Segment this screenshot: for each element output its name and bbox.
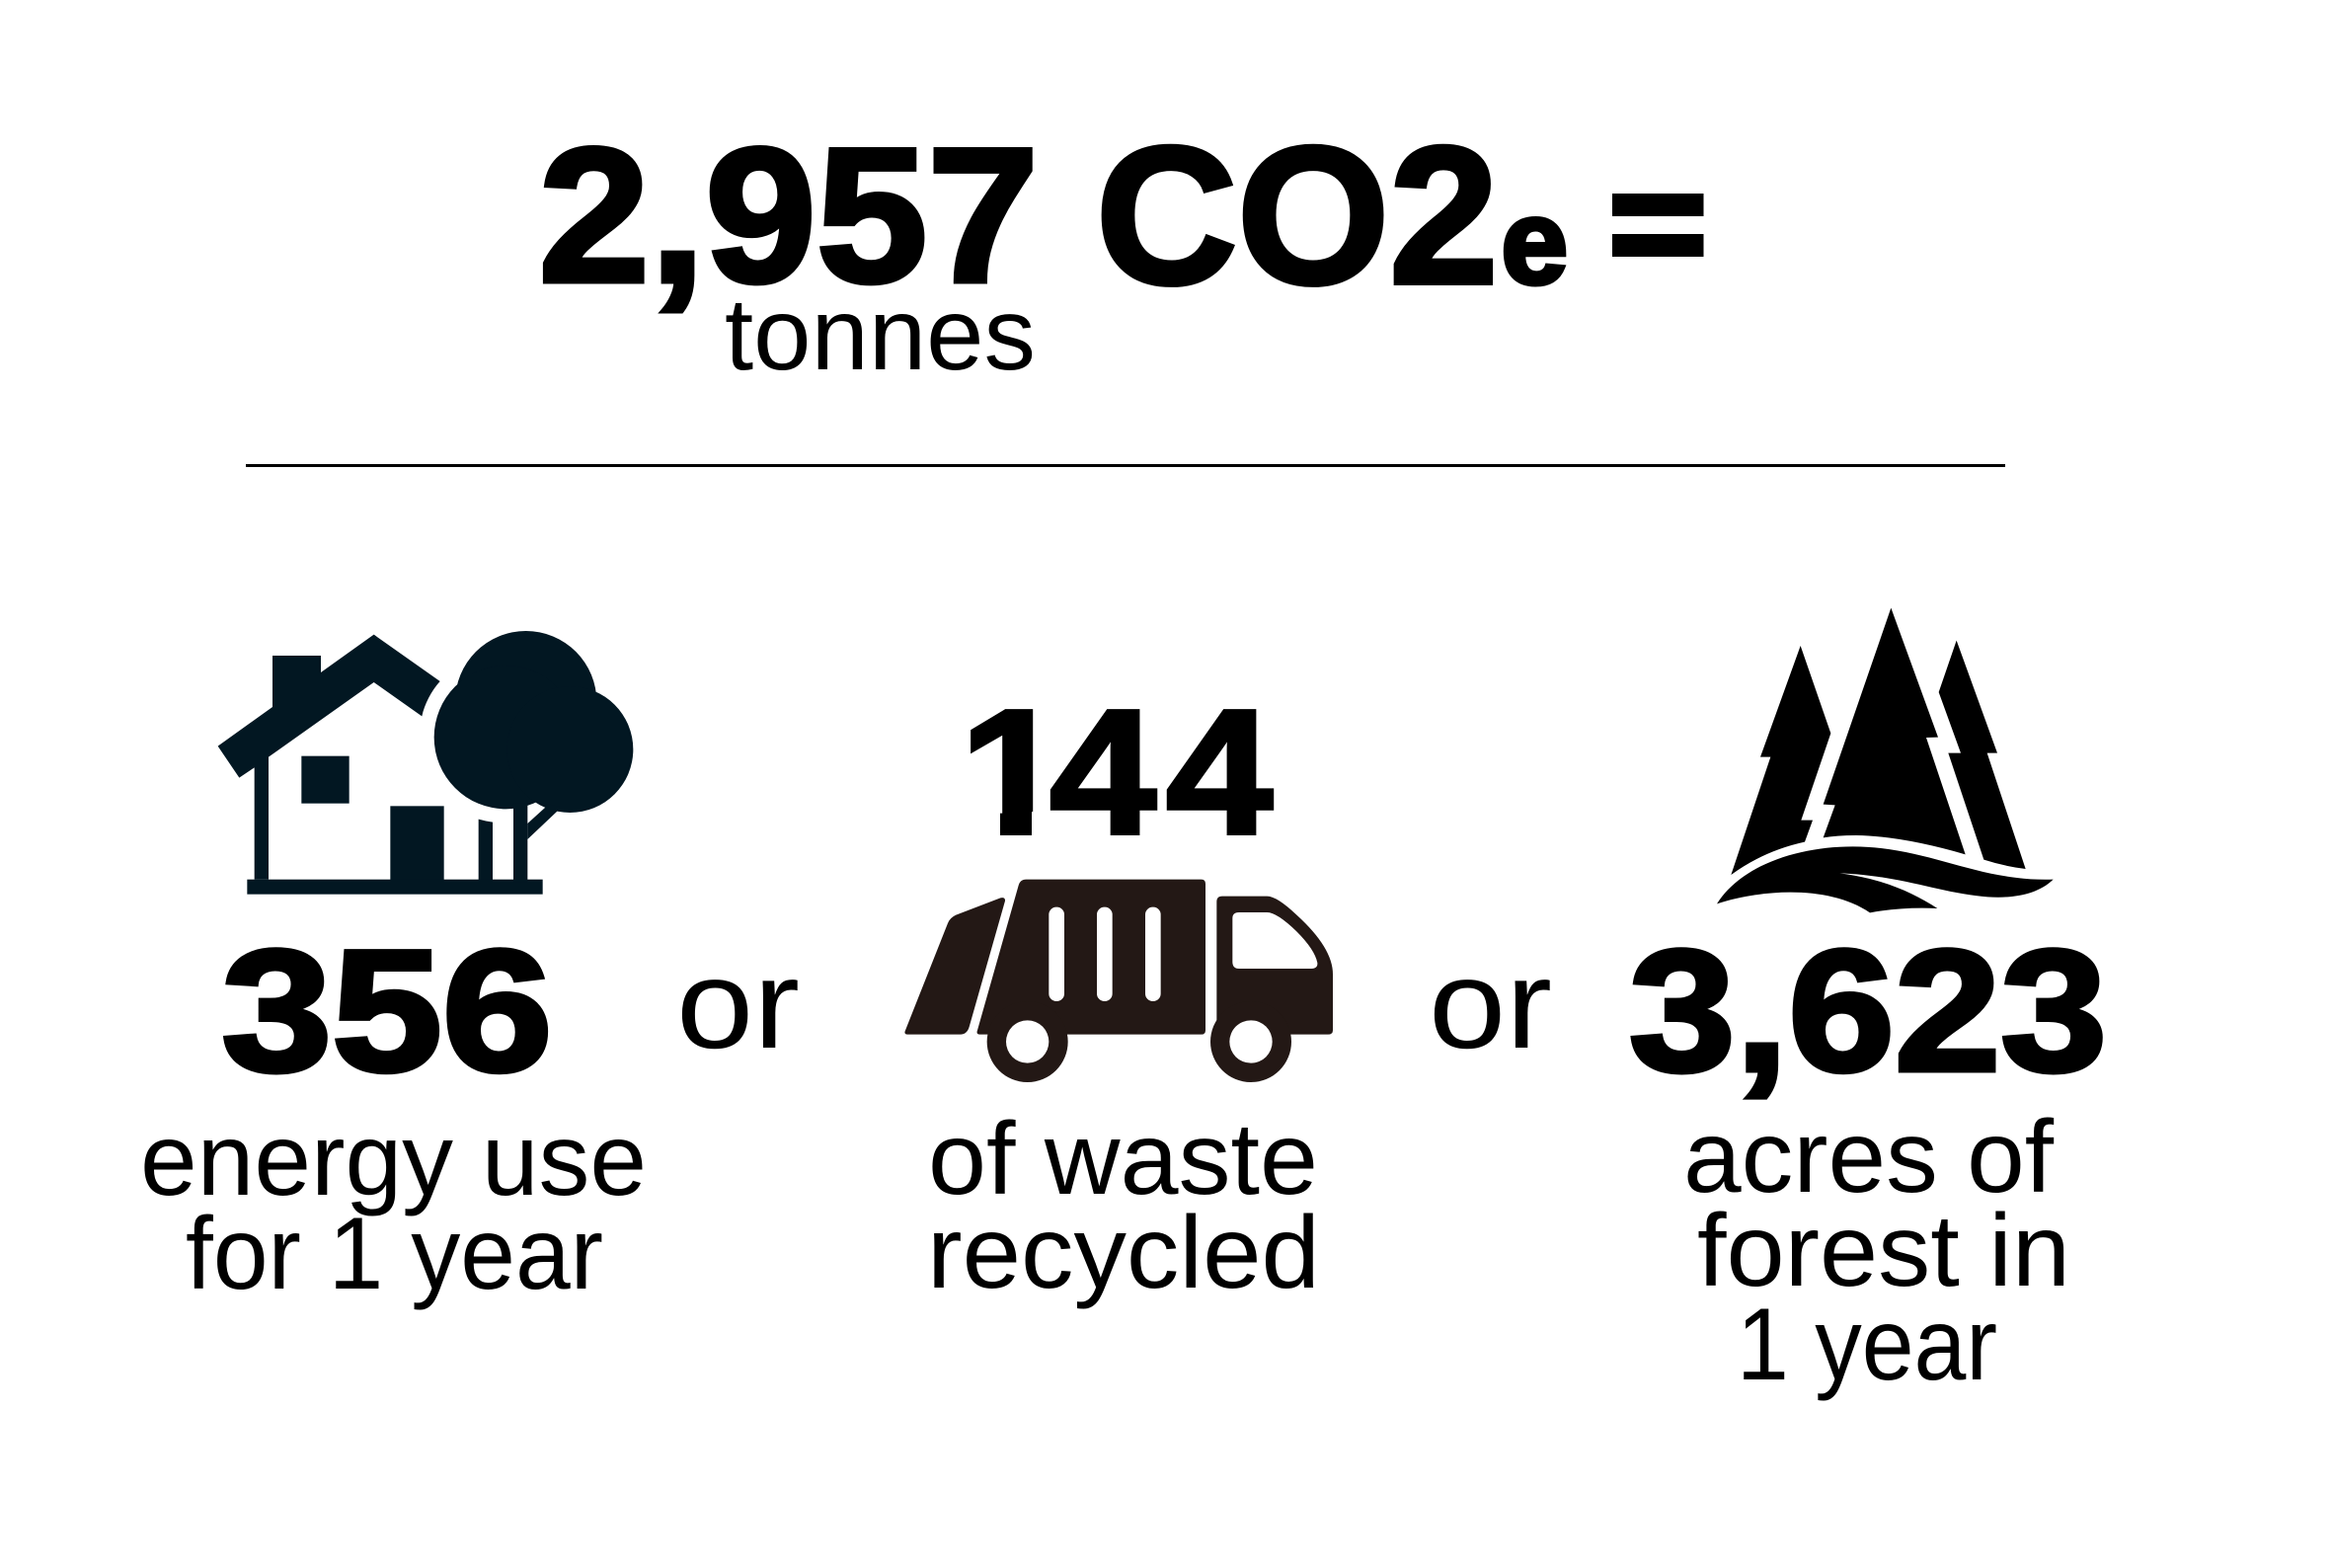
stat: 144: 144 <box>960 672 1273 871</box>
panel: waste recycled <box>904 672 1333 1310</box>
title: 2,957 tonnes CO2e equals <box>539 107 1704 392</box>
stat: 3,623: 3,623 <box>1629 915 2107 1108</box>
panel: forest <box>1629 608 2107 1402</box>
label: acres of forest in 1 year: forest in <box>1697 1194 2070 1308</box>
label: acres of forest in 1 year: 1 year <box>1737 1288 1997 1402</box>
subscript e: e <box>1501 175 1568 309</box>
connector: or: or <box>1429 934 1552 1075</box>
CO2: CO2 <box>1096 107 1499 324</box>
label: acres of forest in 1 year <box>1683 1100 2070 1402</box>
label: of waste recycled <box>927 1102 1320 1310</box>
stat: 356: 356 <box>221 915 553 1108</box>
connector: or: or <box>676 934 800 1075</box>
label: of waste recycled: of waste <box>928 1102 1318 1216</box>
label: acres of forest in 1 year: acres of <box>1683 1100 2055 1215</box>
headline number: 2,957 <box>539 109 1039 323</box>
icon: garbage truck <box>904 880 1333 1082</box>
label: energy use for 1 year: for 1 year <box>186 1197 603 1311</box>
icon: house and tree <box>218 631 633 895</box>
panel: energy use <box>140 631 647 1311</box>
tonnes unit: tonnes <box>725 277 1036 392</box>
equals sign <box>1612 194 1704 257</box>
icon: forest trees and hill <box>1717 608 2054 912</box>
label: energy use for 1 year: energy use <box>140 1103 647 1217</box>
label: energy use for 1 year <box>140 1103 647 1311</box>
label: of waste recycled: recycled <box>927 1196 1320 1310</box>
